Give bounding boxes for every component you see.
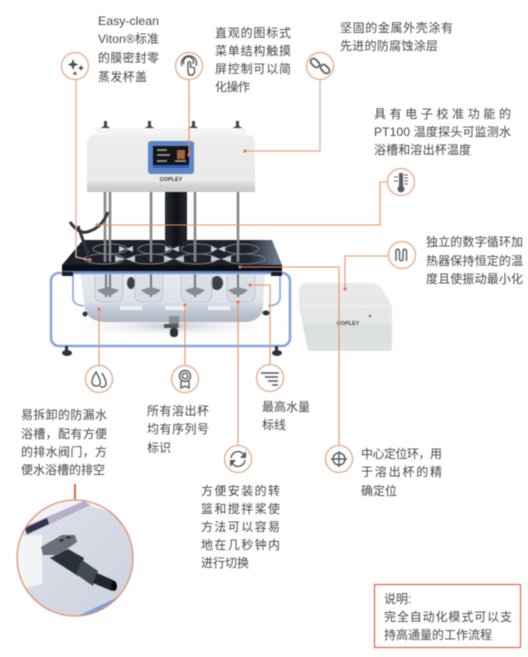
text: serial numbers: 均有序列号 [147,421,209,436]
note box [374,584,520,648]
text: Viton lid [98,14,159,84]
text: basket and paddle: 地在几秒钟内 [201,537,280,552]
text: PT100 probe: 浴槽和溶出杯温度 [374,142,471,157]
text: Viton lid: Viton®标准 [98,32,159,46]
callout: valve detail photo [17,484,133,616]
drive head housing [87,128,255,192]
text: circulating heater: 度且使振动最小化 [426,271,523,286]
knobs [99,121,244,132]
text: circulating heater: 独立的数字循环加 [426,234,523,249]
text: serial numbers [147,403,209,455]
note box: 持高通量的工作流程 [384,627,492,642]
icon: certificate badge [172,366,198,392]
text: water level mark: 标线 [262,418,286,432]
text: serial numbers: 标识 [147,441,171,455]
text: serial numbers: 所有溶出杯 [147,403,209,418]
heater unit [299,283,392,351]
text: basket and paddle: 进行切换 [201,556,249,570]
text: water bath [21,407,107,477]
text: water level mark [262,399,310,432]
icon: touch hand [176,52,202,80]
top plate [62,240,282,276]
text: PT100 probe [374,106,511,157]
central column [165,192,187,246]
drain valve [164,316,179,337]
text: centring ring: 确定位 [361,483,397,498]
text: basket and paddle [201,483,280,570]
text: metal housing: 坚固的金属外壳涂有 [340,20,453,35]
text: PT100 probe: 具有电子校准功能的 [374,106,511,121]
text: water level mark: 最高水量 [262,399,310,414]
text: Viton lid: 的膜密封零 [98,50,159,65]
note box: 说明: [384,591,411,606]
text: water bath: 易拆卸的防漏水 [21,407,107,422]
icon: chain link [306,52,334,80]
text: water bath: 便水浴槽的排空 [21,462,105,477]
text: basket and paddle: 方法可以容易 [201,519,280,534]
icon: water level [256,364,284,392]
heater brand label: COPLEY [337,321,360,327]
text: PT100 probe: PT100 温度探头可监测水 [374,124,511,139]
text: basket and paddle: 篮和搅拌桨使 [201,501,280,516]
text: touch screen menu: 直观的图标式 [215,25,291,40]
text: touch screen menu: 化操作 [215,79,250,94]
hose [70,212,108,260]
text: centring ring [361,446,442,498]
text: centring ring: 中心定位环，用 [361,446,442,461]
icon: rotate arrows [224,446,252,472]
instrument: dissolution tester [51,121,290,356]
text: water bath: 的排水阀门，方 [21,444,107,459]
text: touch screen menu [215,25,291,94]
text: centring ring: 于溶出杯的精 [361,464,442,479]
text: metal housing [340,20,453,53]
text: Viton lid: 蒸发杯盖 [98,69,147,84]
text: touch screen menu: 菜单结构触摸 [215,43,291,58]
blue support frame [51,273,290,346]
feet [62,310,282,356]
water bath [60,270,284,338]
touch screen [148,141,194,174]
icon: sparkle [62,52,88,80]
drive rods [105,192,238,262]
text: Viton lid: Easy-clean [98,14,159,28]
text: water bath: 浴槽，配有方便 [21,426,107,441]
text: metal housing: 先进的防腐蚀涂层 [340,38,438,53]
text: touch screen menu: 屏控制可以简 [215,62,291,76]
text: circulating heater: 热器保持恒定的温 [426,253,523,268]
text: basket and paddle: 方便安装的转 [201,483,280,498]
icon: centring target [326,446,352,472]
icon: water drops [86,366,112,392]
icon: heating coil [388,242,416,268]
brand label: COPLEY [160,177,183,183]
text: circulating heater [426,234,523,286]
icon: thermometer [388,168,414,196]
leader lines [76,80,388,445]
note box: 完全自动化模式可以支 [384,609,512,624]
